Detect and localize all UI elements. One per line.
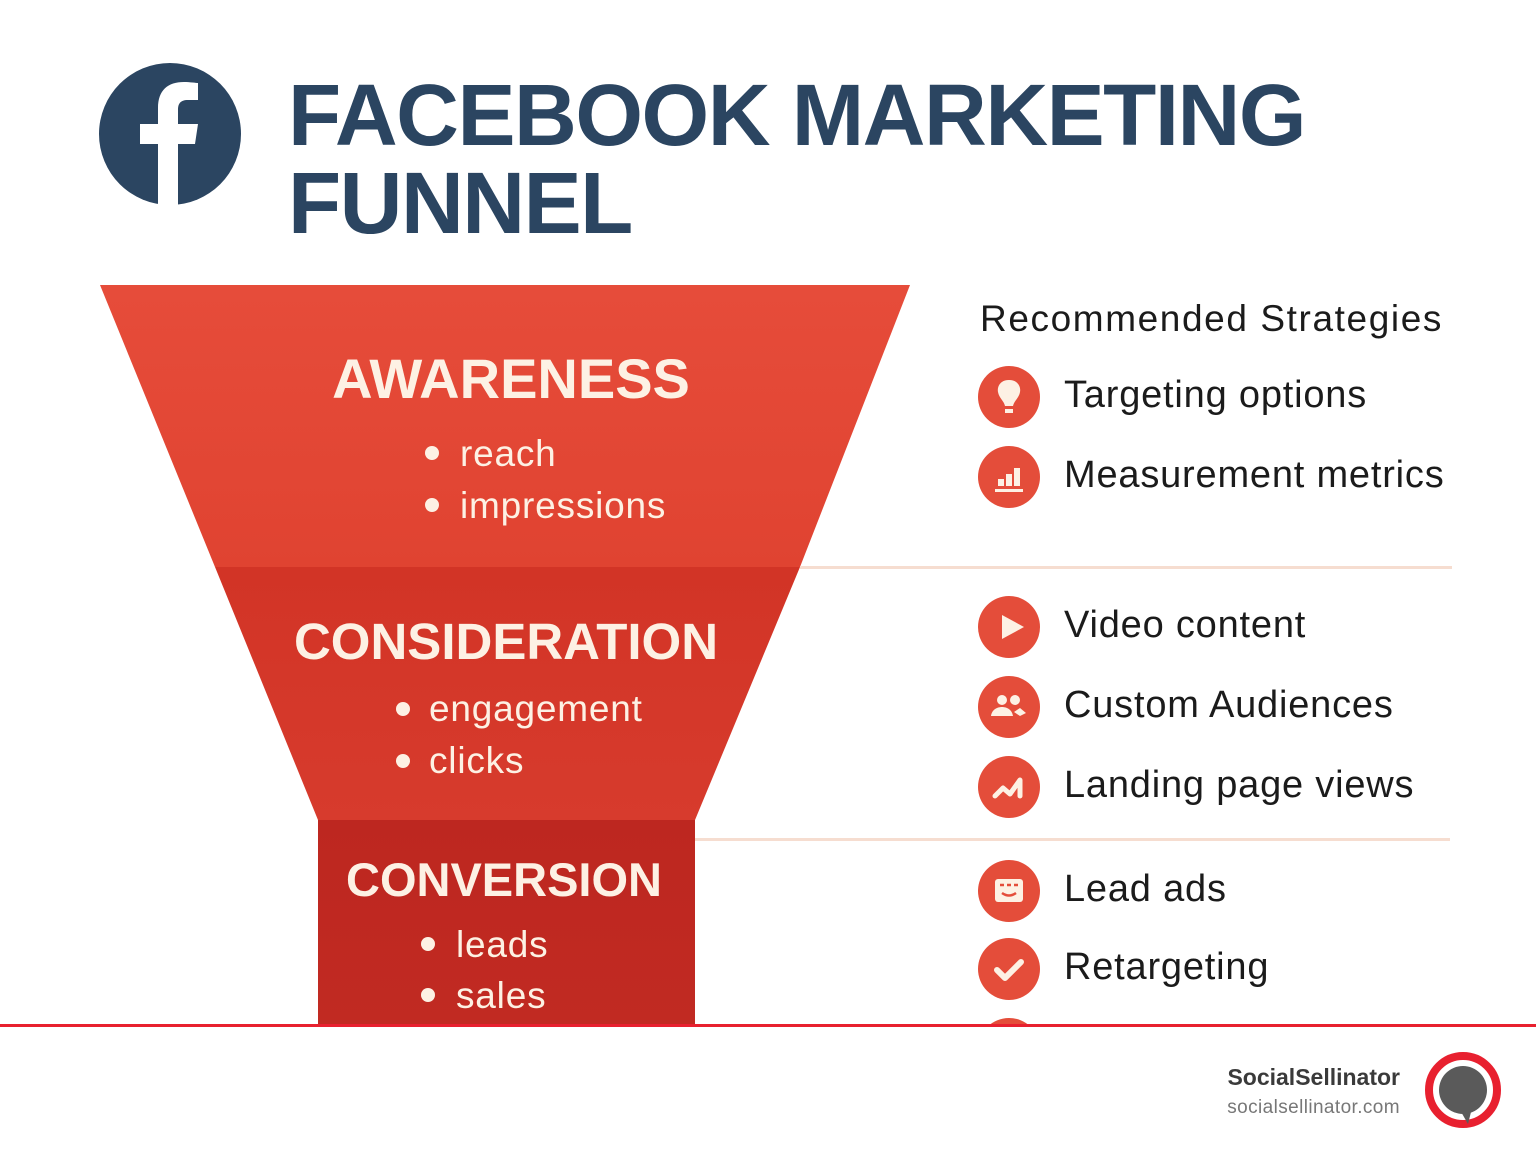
logo: facebook [99,63,241,204]
funnel [100,285,910,1024]
funnel: conversion: leads [456,924,548,965]
heading: recommended strategies: Recommended Strategies [980,298,1443,339]
funnel: consideration: CONSIDERATION [294,613,718,670]
title [288,67,1305,252]
strategy: retargeting [978,938,1269,1000]
funnel: awareness [100,285,910,567]
strategy: measurement: Measurement metrics [1064,454,1445,496]
funnel: conversion [318,820,695,1026]
title: FUNNEL [288,155,632,252]
strategy: video [978,596,1306,658]
strategy: retargeting: Retargeting [1064,946,1269,988]
funnel: consideration: clicks [429,740,524,781]
funnel: conversion: sales [456,975,546,1016]
footer line [0,1024,1536,1027]
strategy: landing page views [978,756,1414,818]
funnel: consideration [215,567,800,820]
footer brand [1227,1064,1400,1118]
funnel: consideration: engagement [429,688,643,729]
funnel: awareness: impressions [460,485,666,526]
funnel: conversion: CONVERSION [346,853,662,906]
footer brand: socialsellinator.com [1227,1097,1400,1118]
title: FACEBOOK MARKETING [288,67,1305,164]
footer brand: SocialSellinator [1227,1064,1400,1090]
funnel: awareness: AWARENESS [332,347,690,410]
strategy: measurement [978,446,1445,508]
logo: socialsellinator [1425,1052,1501,1128]
strategy: landing page views: Landing page views [1064,764,1414,806]
strategy: video: Video content [1064,604,1306,646]
strategy: targeting: Targeting options [1064,374,1367,416]
strategy: custom audiences [978,676,1394,738]
strategy: lead ads [978,860,1227,922]
strategy: targeting [978,366,1367,428]
strategy: lead ads: Lead ads [1064,868,1227,910]
strategy: custom audiences: Custom Audiences [1064,684,1394,726]
funnel: awareness: reach [460,433,557,474]
